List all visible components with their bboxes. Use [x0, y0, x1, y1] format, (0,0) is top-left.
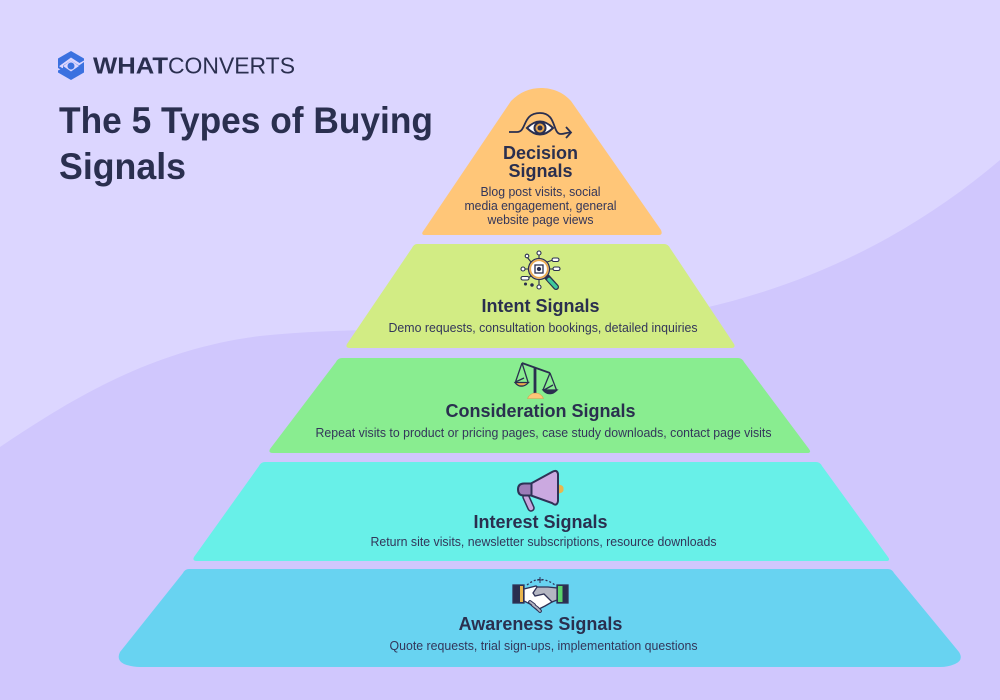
description line 3: website page views	[487, 213, 594, 227]
heading line 2: Signals	[508, 161, 573, 181]
heading: Intent Signals	[481, 296, 600, 316]
description: Demo requests, consultation bookings, detailed inquiries	[388, 321, 698, 335]
logo	[58, 51, 295, 80]
heading: Decision	[503, 143, 578, 163]
logo wordmark light part: CONVERTS	[168, 52, 295, 78]
panel: consideration signals	[269, 358, 810, 453]
panel: intent signals	[346, 244, 735, 348]
panel: interest signals	[193, 462, 889, 561]
description line 2: media engagement, general	[464, 199, 616, 213]
icon: handshake	[513, 577, 568, 611]
heading: Consideration Signals	[445, 401, 636, 421]
panel: decision signals	[422, 88, 662, 235]
icon: logo hexagon	[58, 51, 84, 80]
heading: Interest Signals	[473, 512, 608, 532]
icon: balance scales	[515, 363, 557, 398]
description: Quote requests, trial sign-ups, implementation questions	[390, 639, 698, 653]
icon: eye with arrow	[509, 113, 571, 138]
title: The 5 Types of Buying	[59, 100, 433, 141]
title second line: Signals	[59, 146, 186, 187]
panel: awareness signals	[119, 569, 961, 667]
icon: magnifier with nodes	[521, 251, 560, 289]
heading: Awareness Signals	[459, 614, 622, 634]
description: Return site visits, newsletter subscriptions, resource downloads	[370, 535, 716, 549]
logo wordmark bold part: WHAT	[93, 52, 168, 78]
icon: megaphone	[518, 471, 564, 508]
description: Blog post visits, social	[480, 185, 600, 199]
description: Repeat visits to product or pricing pages, case study downloads, contact page visits	[316, 426, 772, 440]
